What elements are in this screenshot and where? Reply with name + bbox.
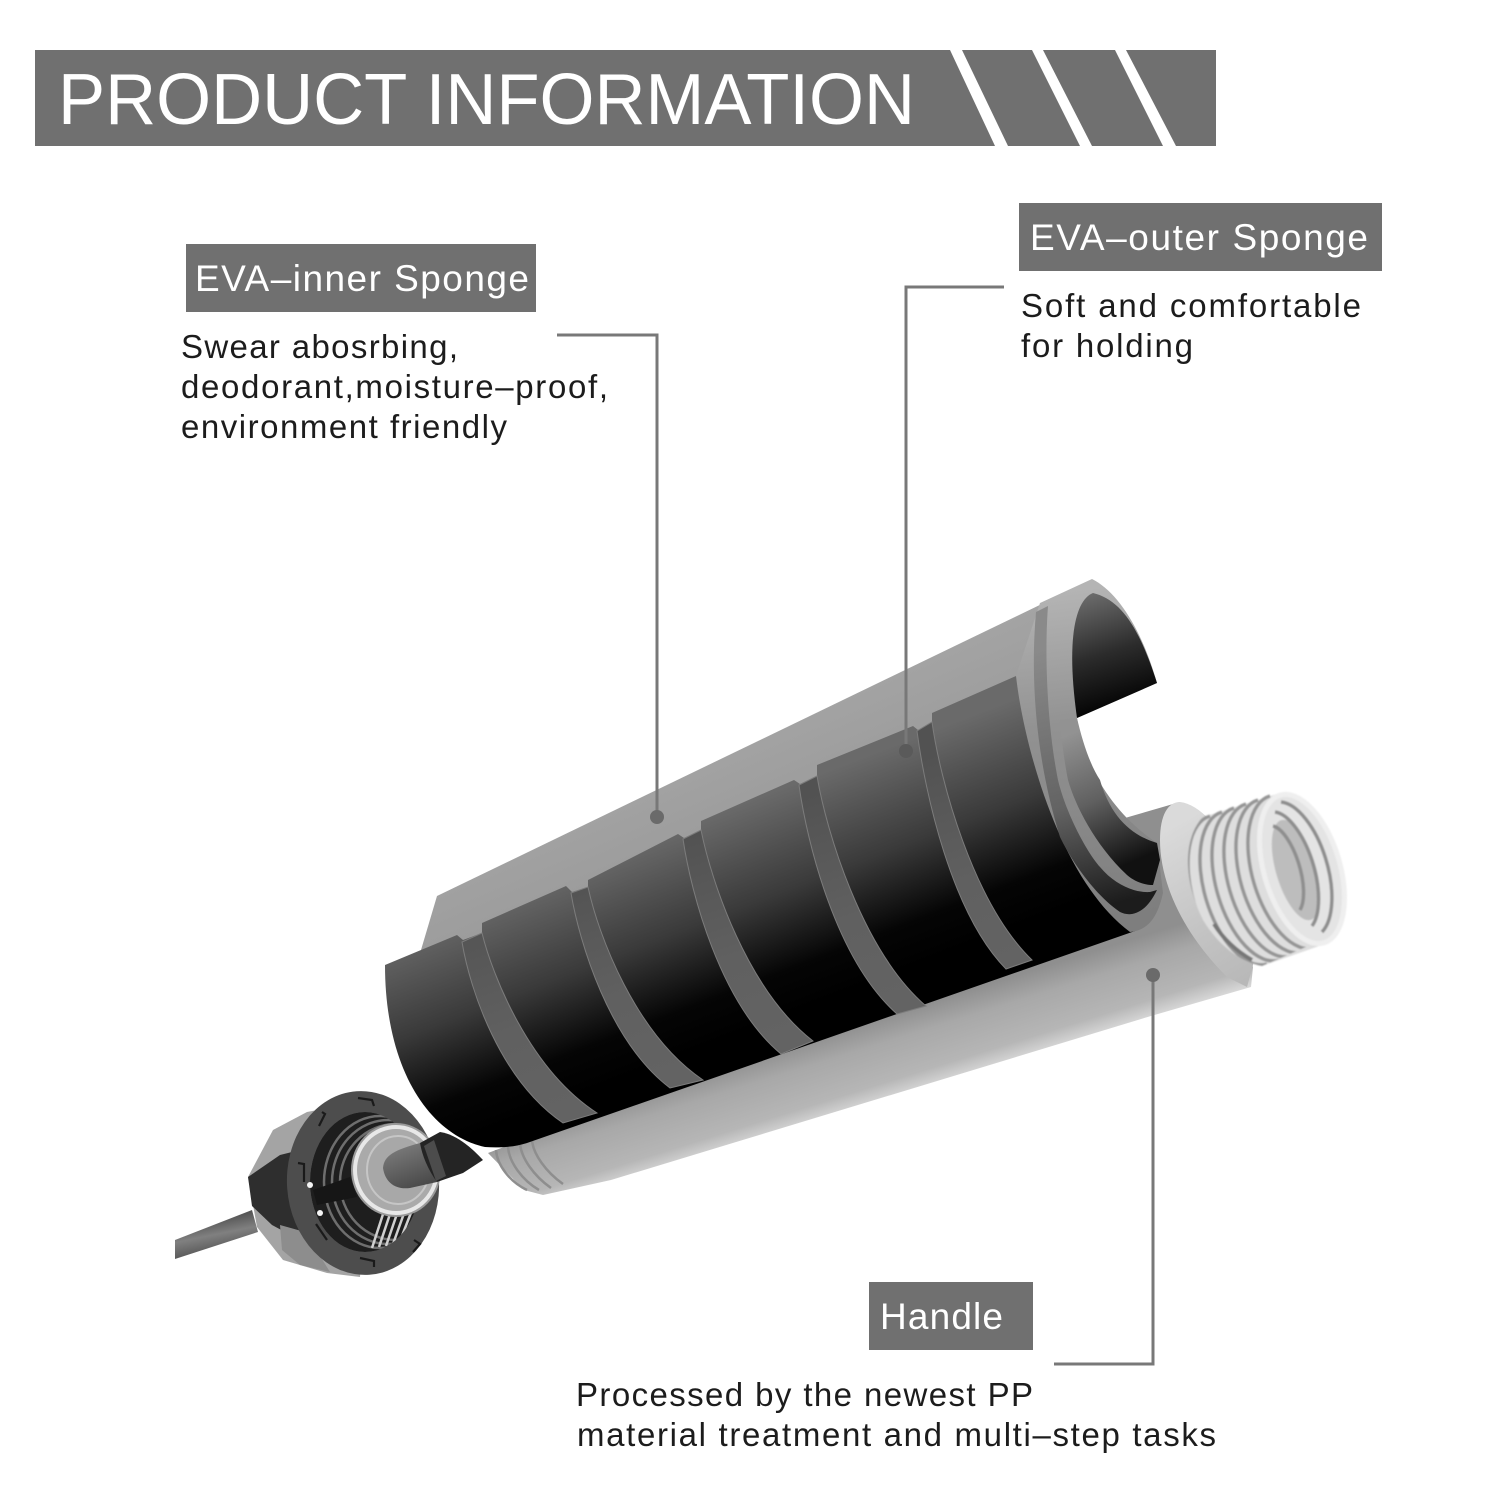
cap ring [281,1086,445,1280]
groove 3 [683,830,813,1054]
label: EVA-inner sponge: EVA–inner Sponge [195,258,529,299]
label: handle: Handle [880,1296,1003,1337]
text: inner sponge description: environment friendly [181,408,508,445]
text: handle description: material treatment and multi–step tasks [577,1416,1216,1453]
label: EVA-outer sponge: EVA–outer Sponge [1030,217,1368,258]
label: handle [869,1282,1033,1350]
inner spiral [1273,802,1332,932]
text: inner sponge description [181,328,608,445]
label: EVA-inner sponge [186,244,536,312]
spring bar [313,1177,357,1205]
text: outer sponge description: for holding [1021,327,1193,364]
groove 4 [799,776,926,1014]
text: outer sponge description: Soft and comfortable [1021,287,1361,324]
text: inner sponge description: Swear abosrbing, [181,328,458,365]
thread body [1187,792,1347,967]
header banner [35,50,1216,146]
groove 1 [462,933,597,1123]
leader: outer sponge [899,287,1004,758]
inner surface band [1060,718,1160,885]
cap body [248,1100,370,1277]
EVA foam wrap with grooves [385,676,1135,1147]
foam rim and inner layers [1016,579,1163,932]
swivel stem [383,1143,437,1188]
cable [175,1210,258,1259]
thread end centre [1262,814,1330,926]
text: handle description: Processed by the newest PP [576,1376,1033,1413]
outer grey shell [421,601,1070,1000]
handle left threads [496,1140,563,1190]
inner dark hollow [1072,593,1157,718]
silver handle body [488,802,1253,1195]
rim base [1016,579,1163,932]
connector cap and cable [175,1086,483,1280]
text: handle description [576,1376,1216,1453]
leader: handle [1054,968,1160,1364]
collar [1160,802,1270,987]
groove 2 [571,887,703,1088]
thread start [1214,924,1252,960]
product: exploded handle illustration [175,579,1360,1280]
band between outer and middle rings [1034,606,1157,914]
groove 5 [917,722,1032,969]
label: EVA-outer sponge [1019,203,1382,271]
threaded collar [1160,792,1347,987]
cap opening with spring [310,1112,414,1252]
text: outer sponge description [1021,287,1361,364]
metal disc [351,1123,441,1217]
ring ticks [298,1098,420,1267]
title: PRODUCT INFORMATION [58,60,915,140]
text: inner sponge description: deodorant,moisture–proof, [181,368,608,405]
leader: inner sponge [557,335,664,824]
thread end ring [1244,784,1360,954]
black connector [420,1132,483,1182]
